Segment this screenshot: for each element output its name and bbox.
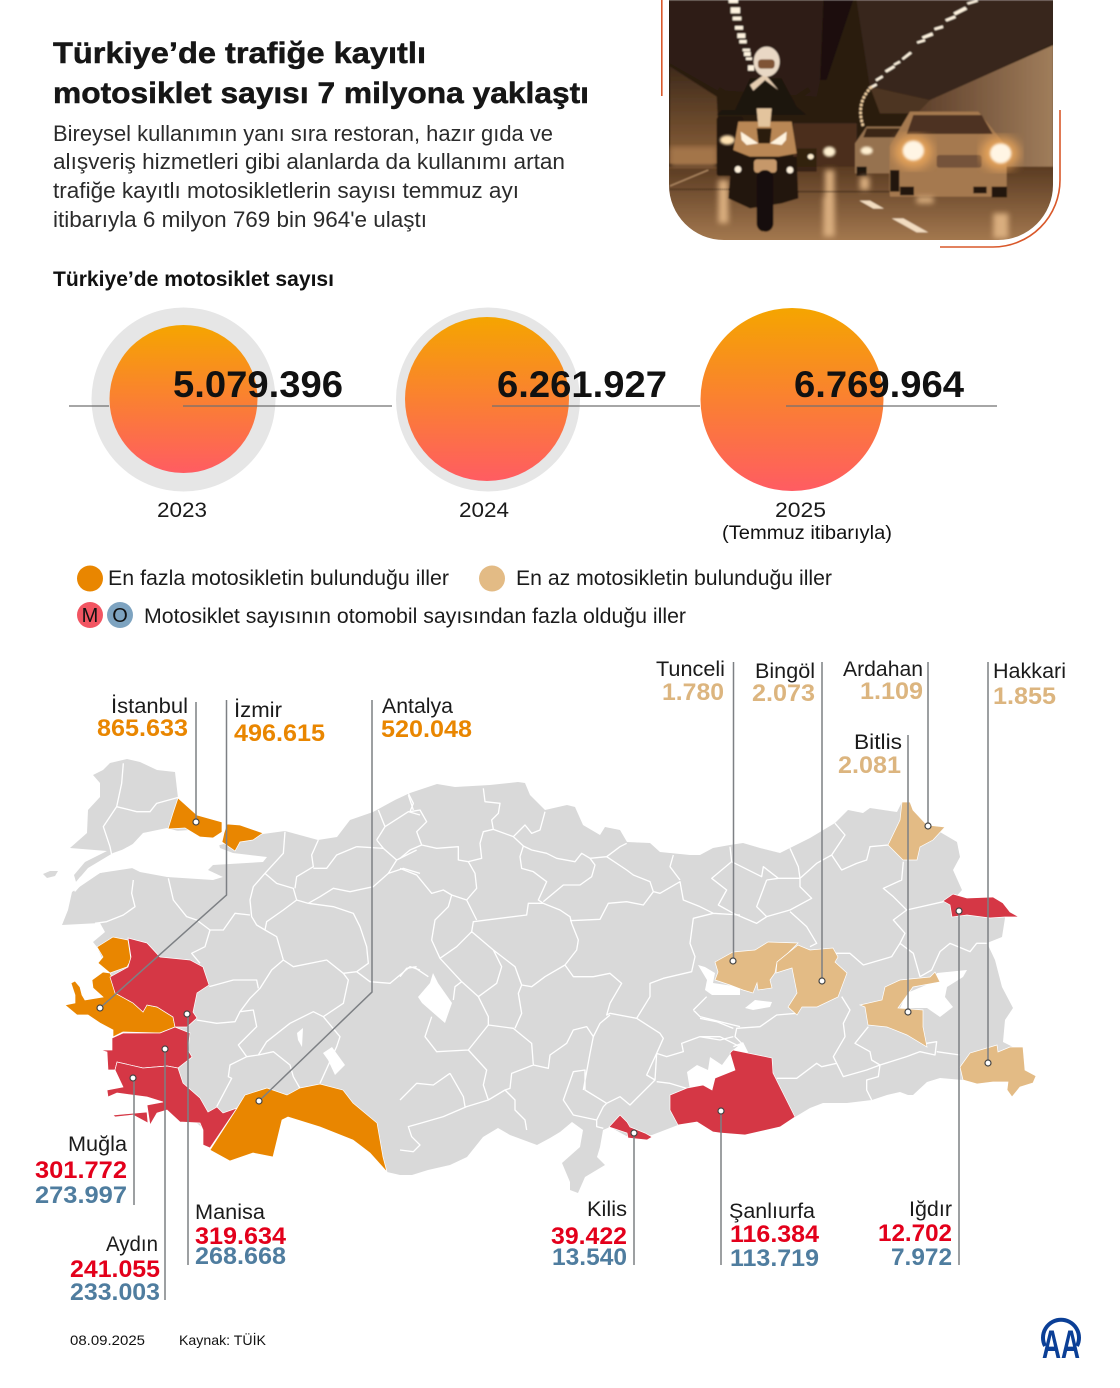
- label: Manisa: [195, 1201, 287, 1270]
- label: Bingöl: [752, 660, 815, 707]
- label: Şanlıurfa: [729, 1200, 820, 1272]
- provinces: more motorcycles than cars: [100, 894, 1019, 1148]
- bubble 2023: 2023: [157, 499, 207, 522]
- label: Bitlis: Bitlis: [854, 731, 902, 754]
- label: Kilis: Kilis: [587, 1198, 627, 1221]
- label: Antalya: Antalya: [382, 695, 453, 718]
- label: Antalya: [381, 695, 472, 743]
- label: Şanlıurfa: 116.384: [730, 1221, 820, 1248]
- footer: date and source: 08.09.2025: [70, 1332, 145, 1348]
- label: Hakkari: [993, 660, 1066, 710]
- footer: date and source: [70, 1331, 267, 1348]
- intro paragraph: Bireysel kullanımın yanı sıra restoran, hazır gıda ve: [53, 121, 553, 146]
- leader lines and markers: [97, 662, 991, 1300]
- label: Kilis: 39.422: [551, 1223, 627, 1250]
- label: Antalya: 520.048: [381, 716, 472, 743]
- icon: AA logo: AA: [1042, 1323, 1080, 1367]
- label: Manisa: 268.668: [195, 1243, 286, 1270]
- label: Tunceli: Tunceli: [656, 658, 725, 681]
- label: Bingöl: 2.073: [752, 680, 815, 707]
- bubble chart: motorcycle counts: [69, 308, 997, 544]
- label: Iğdır: [878, 1198, 952, 1271]
- title: [53, 37, 589, 110]
- lane marks: [670, 189, 890, 192]
- label: İstanbul: [97, 695, 188, 742]
- label: Iğdır: 12.702: [878, 1220, 952, 1247]
- bubble 2023: [92, 308, 343, 522]
- label: İzmir: [234, 699, 325, 747]
- distant lights: [797, 148, 817, 172]
- bubble 2025: 6.769.964: [794, 364, 964, 405]
- footer: date and source: Kaynak: TÜİK: [179, 1331, 267, 1348]
- province borders: [95, 763, 987, 1152]
- intro paragraph: trafiğe kayıtlı motosikletlerin sayısı temmuz ayı: [53, 178, 519, 203]
- legend: Motosiklet sayısının otomobil sayısından fazla olduğu iller: [144, 605, 686, 628]
- label: İstanbul: İstanbul: [111, 695, 188, 718]
- label: Muğla: 301.772: [35, 1157, 127, 1184]
- map of Turkey: [43, 759, 1036, 1193]
- label: Aydın: Aydın: [106, 1233, 158, 1256]
- middle car: [855, 127, 903, 173]
- legend: En az motosikletin bulunduğu iller: [516, 567, 832, 590]
- bubble 2025: 2025: [775, 499, 826, 522]
- label: Tunceli: [656, 658, 725, 706]
- base land: [43, 759, 1023, 1193]
- legend: [77, 566, 832, 628]
- water bodies: [72, 828, 967, 1092]
- provinces: most motorcycles: [65, 798, 387, 1172]
- section heading: Türkiye’de motosiklet sayısı: [53, 268, 334, 291]
- label: Iğdır: Iğdır: [909, 1198, 952, 1221]
- bubble 2023: 5.079.396: [173, 364, 343, 405]
- bubble 2025: [700, 308, 964, 544]
- rider: [717, 78, 807, 115]
- label: Manisa: Manisa: [195, 1201, 265, 1224]
- label: Muğla: Muğla: [68, 1133, 127, 1156]
- legend: M: [82, 605, 98, 627]
- label: Tunceli: 1.780: [662, 679, 724, 706]
- bubble 2024: [396, 308, 667, 522]
- intro paragraph: itibarıyla 6 milyon 769 bin 964'e ulaştı: [53, 207, 427, 232]
- provinces: fewest motorcycles: [715, 802, 1036, 1097]
- label: Ardahan: 1.109: [860, 678, 923, 705]
- label: İstanbul: 865.633: [97, 715, 188, 742]
- photo: motorcycle rider in tunnel: [650, 0, 1070, 247]
- label: Bingöl: Bingöl: [755, 660, 815, 683]
- label: İzmir: İzmir: [234, 699, 282, 722]
- label: Ardahan: [843, 658, 923, 705]
- label: Muğla: 273.997: [35, 1182, 127, 1209]
- label: Manisa: 319.634: [195, 1223, 287, 1250]
- label: Aydın: 241.055: [70, 1256, 160, 1283]
- bubble 2024: 6.261.927: [497, 364, 667, 405]
- legend: O: [112, 605, 128, 627]
- label: Kilis: [551, 1198, 627, 1271]
- title: Türkiye’de trafiğe kayıtlı: [53, 37, 426, 70]
- car behind rider: [716, 117, 738, 176]
- label: Şanlıurfa: 113.719: [730, 1245, 819, 1272]
- intro paragraph: [53, 121, 565, 232]
- right car: [889, 112, 1007, 197]
- label: Şanlıurfa: Şanlıurfa: [729, 1200, 815, 1223]
- icon: AA logo: [1042, 1320, 1080, 1367]
- label: İzmir: 496.615: [234, 720, 325, 747]
- label: Iğdır: 7.972: [891, 1244, 952, 1271]
- bubble 2025: (Temmuz itibarıyla): [722, 523, 892, 544]
- bubble 2024: 2024: [459, 499, 509, 522]
- label: Bitlis: 2.081: [838, 752, 901, 779]
- label: Bitlis: [838, 731, 902, 779]
- intro paragraph: alışveriş hizmetleri gibi alanlarda da kullanımı artan: [53, 149, 565, 174]
- title: motosiklet sayısı 7 milyona yaklaştı: [53, 77, 589, 110]
- label: Kilis: 13.540: [552, 1244, 627, 1271]
- label: Hakkari: 1.855: [993, 683, 1056, 710]
- label: Aydın: 233.003: [70, 1279, 160, 1306]
- legend: En fazla motosikletin bulunduğu iller: [108, 567, 449, 590]
- label: Hakkari: Hakkari: [993, 660, 1066, 683]
- label: Ardahan: Ardahan: [843, 658, 923, 681]
- label: Muğla: [35, 1133, 127, 1209]
- label: Aydın: [70, 1233, 160, 1306]
